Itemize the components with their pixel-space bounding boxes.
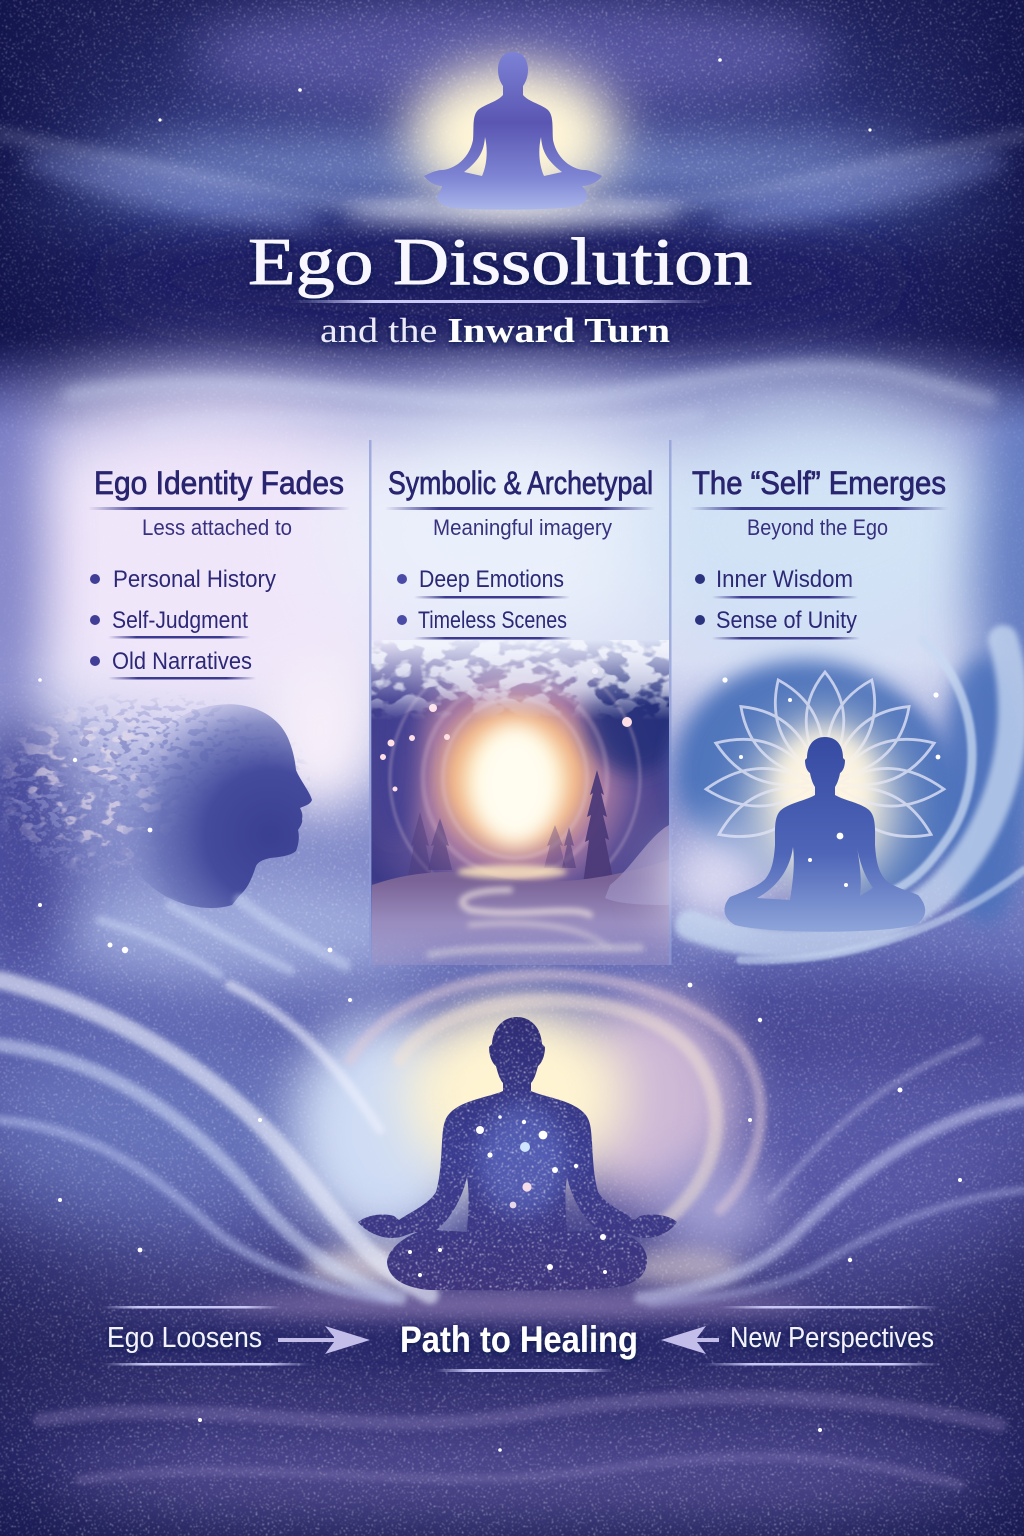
list item — [397, 566, 570, 598]
subheading: Less attached to — [142, 515, 292, 540]
list item: Personal History — [113, 566, 276, 593]
icon: central meditating figure — [358, 1017, 677, 1290]
subtitle: and the Inward Turn — [320, 311, 670, 350]
heading: Ego Identity Fades — [94, 465, 344, 501]
title rule — [290, 300, 710, 303]
illustration: forest tunnel of light — [369, 640, 685, 965]
list item: Timeless Scenes — [418, 607, 567, 634]
body stars — [408, 1115, 607, 1277]
panel dividers — [369, 440, 672, 965]
main title: Ego Dissolution — [248, 225, 752, 299]
list item — [695, 607, 860, 640]
footer: path to healing — [102, 1306, 940, 1372]
arrow: right — [278, 1326, 370, 1354]
subheading: Meaningful imagery — [433, 515, 612, 540]
list item — [90, 607, 250, 638]
title — [248, 225, 752, 350]
panel: Ego Identity Fades — [88, 465, 350, 680]
subheading: Beyond the Ego — [747, 515, 888, 540]
blue field — [675, 660, 935, 880]
swirl: top light streaks — [0, 135, 1024, 430]
mottled top edge — [371, 640, 669, 720]
heading: The “Self” Emerges — [692, 465, 946, 501]
list item: Sense of Unity — [716, 607, 857, 634]
illustration: dissolving head profile — [0, 680, 345, 975]
icon: top meditating figure with halo — [343, 52, 683, 225]
tunnel glows — [380, 668, 632, 792]
swirl: lower cosmic ribbons — [0, 975, 1024, 1485]
seated figure — [725, 737, 925, 932]
list item: Self-Judgment — [112, 607, 248, 634]
tunnel rings — [388, 656, 642, 873]
swirl ribbons — [690, 640, 1024, 960]
list item: Old Narratives — [112, 648, 252, 675]
label: new perspectives: New Perspectives — [730, 1322, 934, 1354]
label: ego loosens: Ego Loosens — [107, 1322, 262, 1354]
arrow: left — [661, 1326, 719, 1354]
list item: Deep Emotions — [419, 566, 564, 593]
tunnel backdrop — [369, 640, 685, 965]
mandala petals — [705, 672, 945, 851]
ground and path — [372, 872, 669, 952]
label: path to healing: Path to Healing — [400, 1319, 638, 1360]
panel: The Self Emerges — [690, 465, 948, 640]
illustration: mandala and emerging self — [660, 640, 1024, 960]
list item: Inner Wisdom — [716, 566, 853, 593]
panel: Symbolic and Archetypal — [385, 465, 655, 640]
tree silhouettes — [408, 770, 614, 884]
heading: Symbolic & Archetypal — [388, 465, 653, 501]
list item — [397, 607, 572, 640]
